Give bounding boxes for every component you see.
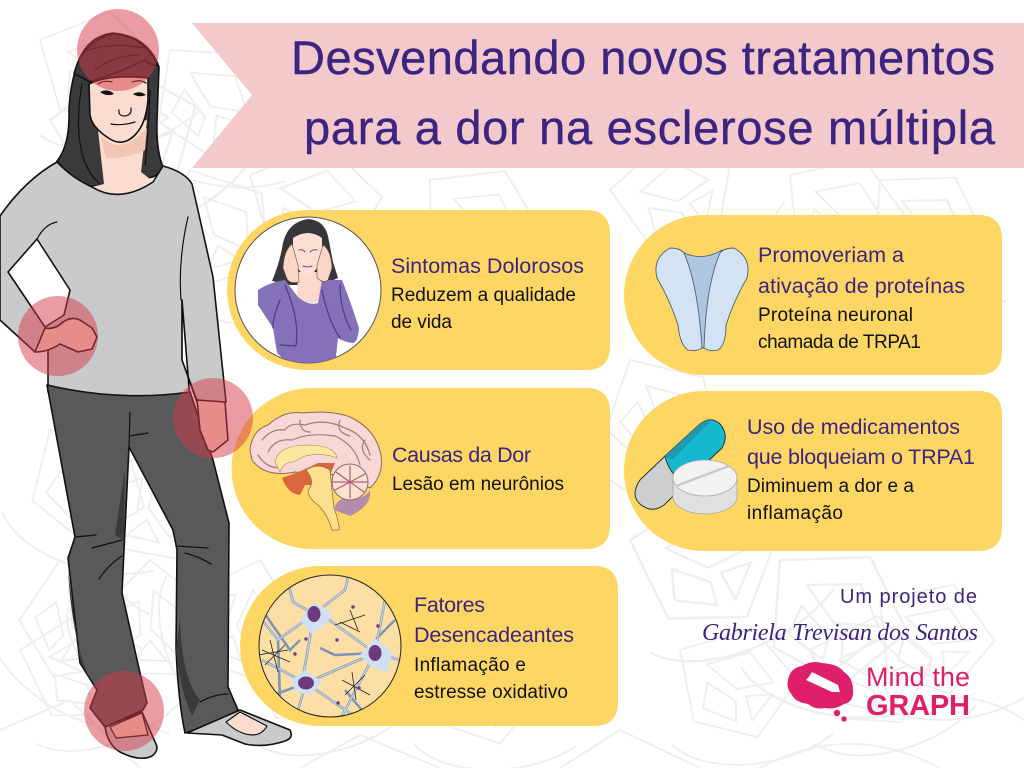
left foot skin	[110, 713, 148, 738]
trousers	[47, 385, 238, 733]
title: para a dor na esclerose múltipla	[304, 101, 996, 154]
hair strands	[78, 45, 150, 184]
hand on hip	[35, 318, 97, 352]
card: medicamentos	[624, 391, 1002, 551]
heading and text: Promoveriam a	[758, 243, 904, 267]
trouser shadows and folds	[68, 412, 228, 716]
credits	[702, 586, 978, 646]
hair	[57, 33, 163, 186]
credits: Gabriela Trevisan dos Santos	[702, 620, 978, 646]
neck shadow	[100, 128, 147, 158]
left shoe	[105, 712, 157, 758]
pain marker: head	[77, 9, 159, 91]
logo: Mind the Graph: Mind the	[866, 662, 970, 692]
credits: Um projeto de	[840, 586, 977, 608]
card: sintomas dolorosos	[227, 210, 610, 370]
card: causas da dor	[232, 388, 610, 549]
heading and text	[414, 593, 574, 703]
heading and text: estresse oxidativo	[414, 682, 568, 703]
heading and text	[392, 443, 564, 495]
heading and text: chamada de TRPA1	[758, 332, 921, 353]
figure: woman	[0, 33, 291, 758]
icon: woman with headache	[235, 217, 381, 365]
heading and text: Sintomas Dolorosos	[391, 254, 584, 278]
icon: brain	[250, 412, 382, 530]
icon: brain with pencil	[788, 662, 853, 722]
title	[291, 31, 996, 154]
heading and text: Desencadeantes	[414, 623, 574, 647]
hair fringe	[74, 34, 158, 82]
icon: neural cells	[258, 570, 401, 720]
logo: Mind the Graph: GRAPH	[866, 690, 970, 722]
pain marker: wrist	[173, 378, 253, 458]
heading and text: Inflamação e	[414, 655, 526, 676]
heading and text: Reduzem a qualidade	[391, 285, 576, 306]
icon: pills	[635, 420, 737, 514]
hanging hand	[197, 400, 228, 452]
sweater	[0, 162, 226, 402]
heading and text: de vida	[391, 312, 452, 333]
heading and text: que bloqueiam o TRPA1	[747, 445, 975, 469]
heading and text: Uso de medicamentos	[747, 415, 960, 439]
facial features	[98, 81, 146, 125]
title banner	[192, 23, 1024, 168]
heading and text: Proteína neuronal	[758, 305, 913, 326]
face	[89, 77, 148, 142]
heading and text: Lesão em neurônios	[392, 474, 564, 495]
heading and text: Diminuem a dor e a	[747, 476, 914, 497]
title: Desvendando novos tratamentos	[291, 31, 995, 84]
heading and text	[747, 415, 975, 524]
heading and text: Causas da Dor	[392, 443, 531, 467]
neck	[92, 120, 154, 199]
pain marker: ankle	[84, 671, 164, 751]
card: ativação de proteínas	[624, 215, 1002, 375]
pain marker: hand	[18, 296, 98, 376]
icon: TRPA1 protein	[656, 248, 748, 351]
sweater folds	[37, 217, 197, 400]
heading and text: inflamação	[747, 503, 843, 524]
heading and text: ativação de proteínas	[758, 274, 965, 298]
heading and text	[391, 254, 584, 333]
card: fatores desencadeantes	[240, 566, 618, 726]
logo: Mind the Graph	[788, 662, 970, 722]
heading and text: Fatores	[414, 593, 485, 617]
right shoe	[187, 710, 291, 745]
right foot skin	[226, 712, 267, 735]
heading and text	[758, 243, 965, 353]
